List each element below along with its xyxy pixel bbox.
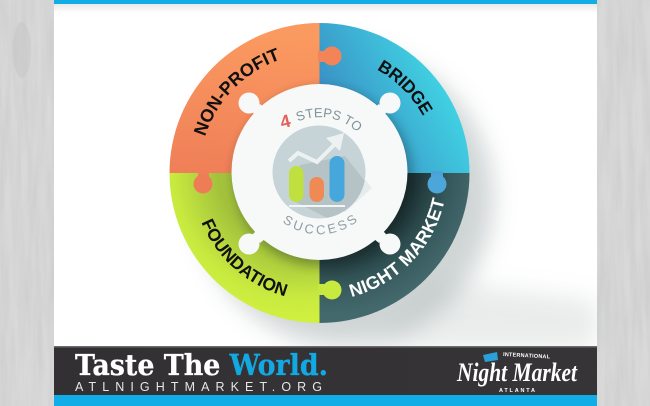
segment: night market [320,171,470,323]
night market script: Night Market [456,358,578,387]
website: ATLNIGHTMARKET.ORG [75,380,322,394]
segment: bridge [320,23,470,173]
label: non-profit: NON-PROFIT [194,48,277,136]
heading: 4 steps to [278,108,362,132]
faint long shadow [330,156,372,212]
logo: international night market atlanta [456,352,578,394]
trend arrow [289,143,336,162]
footer blue bar [54,395,597,406]
chart icon [272,126,372,222]
segment: non-profit [170,23,342,194]
green bar [289,166,304,202]
white content panel [54,0,597,348]
label: night market: NIGHT MARKET [349,197,444,297]
international: INTERNATIONAL [503,352,551,360]
wheel drop shadow [197,50,597,348]
atlanta: ATLANTA [499,388,535,394]
text: steps to: STEPS TO [296,108,362,130]
ribbon [483,352,498,362]
center disc [232,84,413,267]
text: success: SUCCESS [284,215,356,234]
puzzle wheel [170,23,470,323]
grey circle [272,126,366,218]
orange bar [310,177,324,202]
footer band [54,346,597,396]
long shadow [296,156,364,218]
segment: foundation [170,173,342,323]
numeral 4: 4 [278,111,293,132]
blue bar [330,156,344,202]
top blue bar [54,0,597,4]
tagline: Taste The World. [75,348,328,382]
base line [289,205,345,207]
label: bridge: BRIDGE [378,60,433,116]
label: foundation: FOUNDATION [202,218,288,296]
